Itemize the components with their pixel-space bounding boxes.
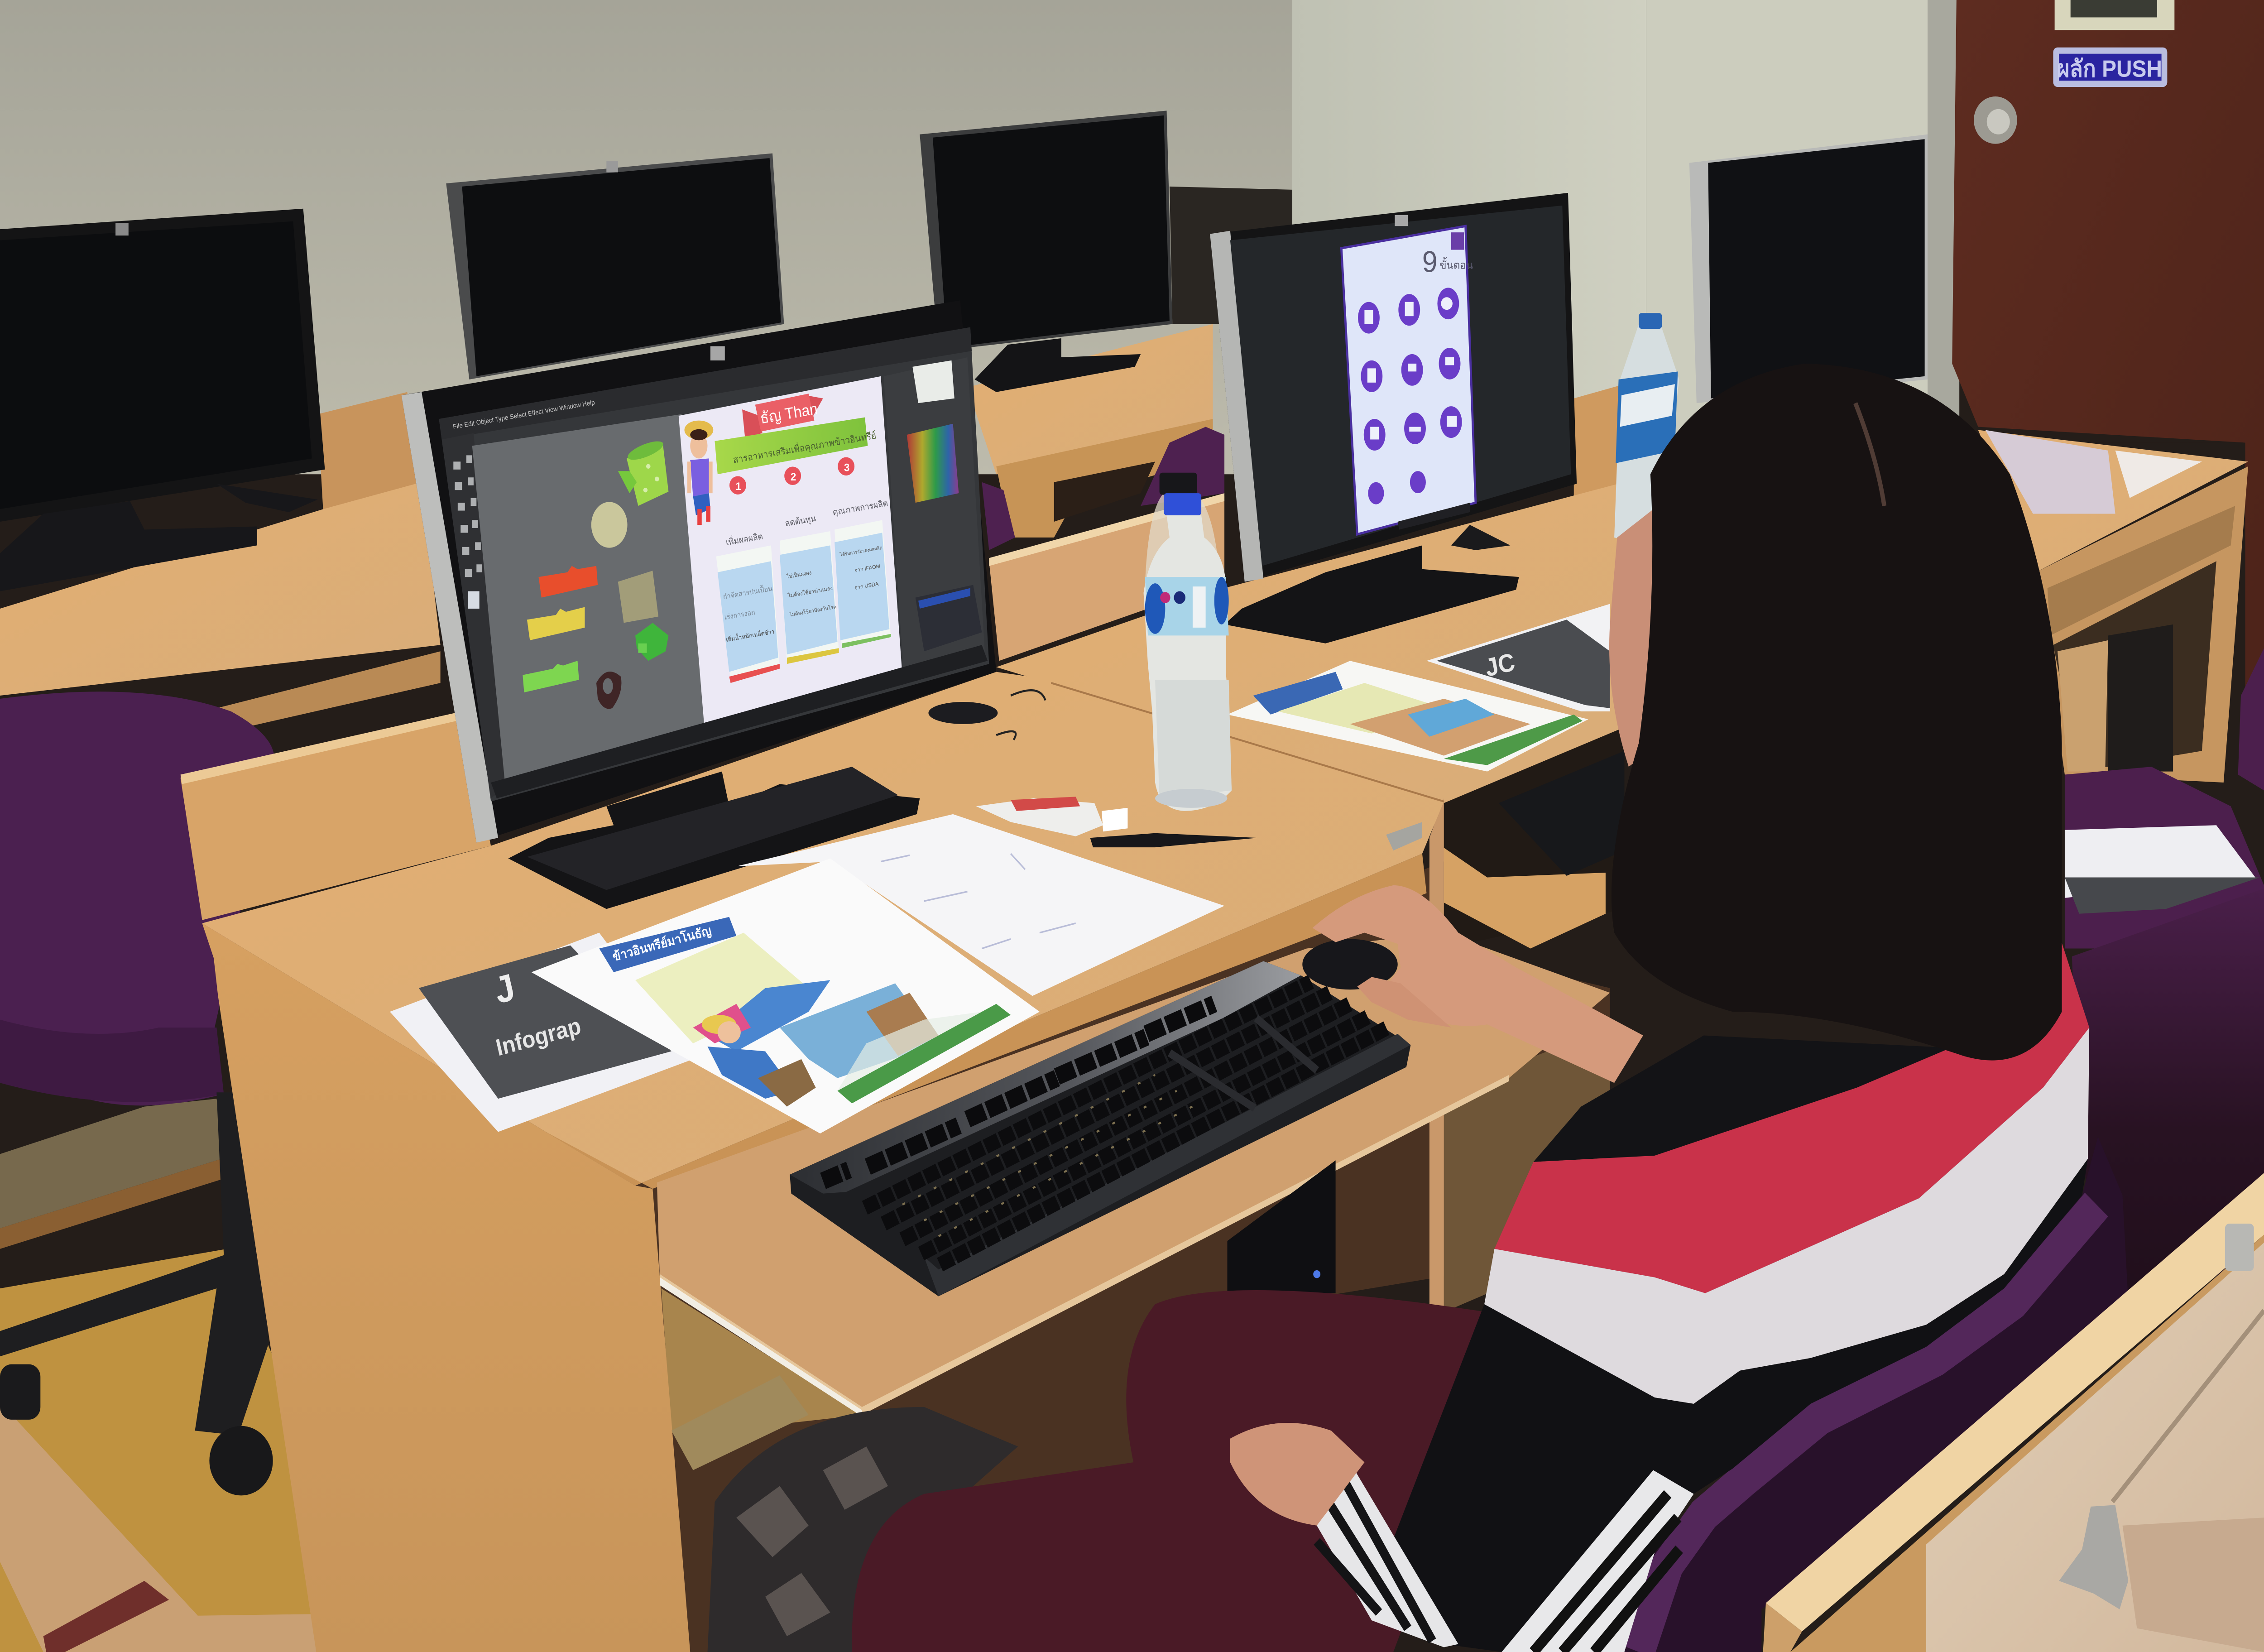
desk papers: right desk [1227, 604, 1610, 772]
icon: money [635, 623, 668, 661]
handwritten sheet [736, 814, 1224, 996]
card 1 [716, 545, 780, 683]
background wall [0, 0, 1959, 474]
column heading 2: ลดต้นทุน [784, 513, 817, 529]
front desk back panel [181, 711, 491, 920]
bag zipper pull [2225, 1224, 2254, 1271]
monitor: far right [1689, 134, 1928, 403]
column heading 1: เพิ่มผลผลิต [725, 530, 763, 547]
red ribbon title [742, 394, 823, 438]
front desk [202, 672, 1610, 1652]
water bottle: centre [1144, 473, 1232, 811]
red ribbon title: ธัญ Than [759, 400, 819, 427]
crate strap [43, 1581, 169, 1652]
printed infographic sheet [531, 859, 1040, 1133]
character illustration [684, 421, 713, 525]
thai key legends [902, 1075, 1199, 1236]
keyboard [790, 961, 1410, 1297]
numbered badges [729, 457, 854, 495]
gold swatch [618, 571, 658, 623]
card 1: เพิ่มน้ำหนักเมล็ดข้าว [725, 627, 775, 643]
front lip [924, 1034, 1410, 1297]
side keyboard [1499, 751, 1624, 876]
grey cover booklet: JC [1483, 648, 1517, 682]
main monitor [401, 300, 996, 909]
dark base behind furniture [0, 442, 2264, 1652]
grey cover booklet [1427, 604, 1610, 711]
card 3: จาก USDA [854, 581, 879, 591]
pen [1090, 833, 1257, 847]
stapled booklet: J [491, 966, 519, 1012]
green tag [523, 661, 579, 692]
monitor: nine steps [1210, 193, 1577, 644]
stand [1224, 545, 1519, 644]
tool icons [453, 455, 482, 609]
blue ribbon title: ข้าวอินทรีย์มาโนธัญ [611, 923, 713, 965]
keyboard body [790, 961, 1410, 1297]
red band [1494, 930, 2089, 1293]
office chair: seated person [1624, 1137, 2264, 1652]
card 2: ไม่เป็นผงผง [786, 569, 812, 580]
person sweater [1317, 930, 2089, 1652]
floor under tray [661, 1288, 862, 1431]
software window [439, 327, 989, 802]
screen document: nine steps [1341, 226, 1476, 534]
hand and forearm [1313, 885, 1643, 1083]
right office chairs [2065, 648, 2264, 1328]
door handle [1974, 96, 2017, 144]
back middle desk [967, 324, 1213, 538]
front bottle [1144, 493, 1232, 811]
green banner [715, 418, 877, 474]
black lower band [1383, 1159, 2088, 1652]
right support panel [1444, 1028, 1610, 1312]
column heading 3: คุณภาพการผลิต [832, 498, 888, 518]
back chairs [982, 427, 1224, 550]
monitor stand [508, 767, 920, 909]
tube [976, 797, 1127, 836]
person trousers [852, 1290, 1487, 1652]
function keys [823, 1004, 1214, 1181]
card 1: เร่งการงอก [724, 608, 756, 622]
desk left face [202, 923, 690, 1652]
main monitor: File Edit Object Type Select Effect View Window Help [452, 399, 595, 430]
screen document: nine steps: ขั้นตอน [1439, 257, 1473, 271]
icon: watering can [618, 437, 668, 506]
foreground desk corner [1763, 1173, 2264, 1652]
right desk [989, 384, 1624, 949]
door sign: push [2053, 48, 2167, 87]
water bottle: far right [1614, 313, 1679, 545]
card 1: กำจัดสารปนเปื้อน [722, 583, 773, 601]
lower stripes [1501, 1470, 1693, 1652]
paper on chair [2065, 825, 2259, 914]
artboard document [679, 376, 902, 730]
printed infographic [1227, 661, 1588, 772]
tool panel [442, 433, 505, 798]
card 2 [780, 531, 839, 664]
grey artboard area [472, 414, 707, 787]
monitor: back centre right [920, 110, 1292, 392]
screen document: nine steps: 9 [1422, 245, 1438, 279]
desk seam [1051, 683, 1444, 802]
stapled booklet: Infograp [494, 1013, 583, 1061]
name card [1986, 430, 2115, 514]
under desk dark gap [635, 862, 1610, 1652]
beige bag [1926, 1224, 2264, 1652]
monitor: back left [0, 209, 325, 591]
taskbar [491, 645, 988, 798]
pen and tube [976, 797, 1257, 847]
cable port [1386, 822, 1422, 850]
key group gaps [1170, 1018, 1317, 1108]
black upper band [1533, 1036, 2021, 1162]
white band [1484, 1028, 2089, 1404]
dark shape [596, 672, 621, 709]
numbered badges: 1 [736, 480, 741, 492]
key rows [865, 982, 1387, 1265]
bag clasp [2059, 1505, 2128, 1609]
silver top band [790, 961, 1301, 1194]
hp logo [710, 346, 725, 360]
keyboard tray [657, 933, 1610, 1412]
person hand on lap [1230, 1423, 1364, 1526]
cable and base on desk [928, 690, 1046, 740]
card 3 [835, 520, 891, 648]
desk papers: main desk [390, 814, 1224, 1133]
monitor body [401, 300, 996, 843]
card 2: ไม่ต้องใช้ยาป้องกันโรค [789, 603, 837, 618]
back left desk [0, 392, 441, 727]
under-desk power strip and bag [672, 1375, 1018, 1652]
card 3: ได้รับการรับรองผลผลิต [839, 545, 883, 558]
hp logo [1395, 215, 1408, 226]
desk top surface [202, 672, 1444, 1186]
card 2: ไม่ต้องใช้ยาฆ่าแมลง [787, 585, 833, 599]
left office chair [0, 692, 274, 1495]
sleeve stripes [1317, 1462, 1458, 1647]
mouse [1302, 939, 1398, 989]
circle swatch [591, 502, 628, 548]
blue ribbon title [599, 917, 736, 972]
door window frame [2055, 0, 2174, 30]
back bottle [1145, 473, 1220, 585]
door [1952, 0, 2264, 775]
purple step icons [1358, 288, 1462, 504]
yellow tag [527, 607, 585, 640]
door sign: push: ผลัก PUSH [2057, 55, 2162, 82]
card 3: จาก IFAOM [854, 563, 881, 574]
green footer [837, 1004, 1011, 1104]
numbered badges: 3 [844, 461, 849, 474]
toolbar [439, 327, 972, 439]
red tag [538, 566, 598, 598]
green banner: สารอาหารเสริมเพื่อคุณภาพข้าวอินทรีย์ [732, 428, 877, 466]
stapled booklet [390, 933, 693, 1132]
person hair [1612, 364, 2062, 1061]
far right desk and cabinet [1978, 430, 2248, 783]
floor [0, 1249, 321, 1652]
right side panels [884, 357, 985, 677]
computer tower [1227, 1160, 1336, 1293]
monitor: back centre left [446, 154, 784, 379]
numbered badges: 2 [791, 471, 796, 483]
farmer [702, 1015, 816, 1107]
person face [1609, 506, 1660, 767]
wooden crate corner [0, 1402, 316, 1652]
